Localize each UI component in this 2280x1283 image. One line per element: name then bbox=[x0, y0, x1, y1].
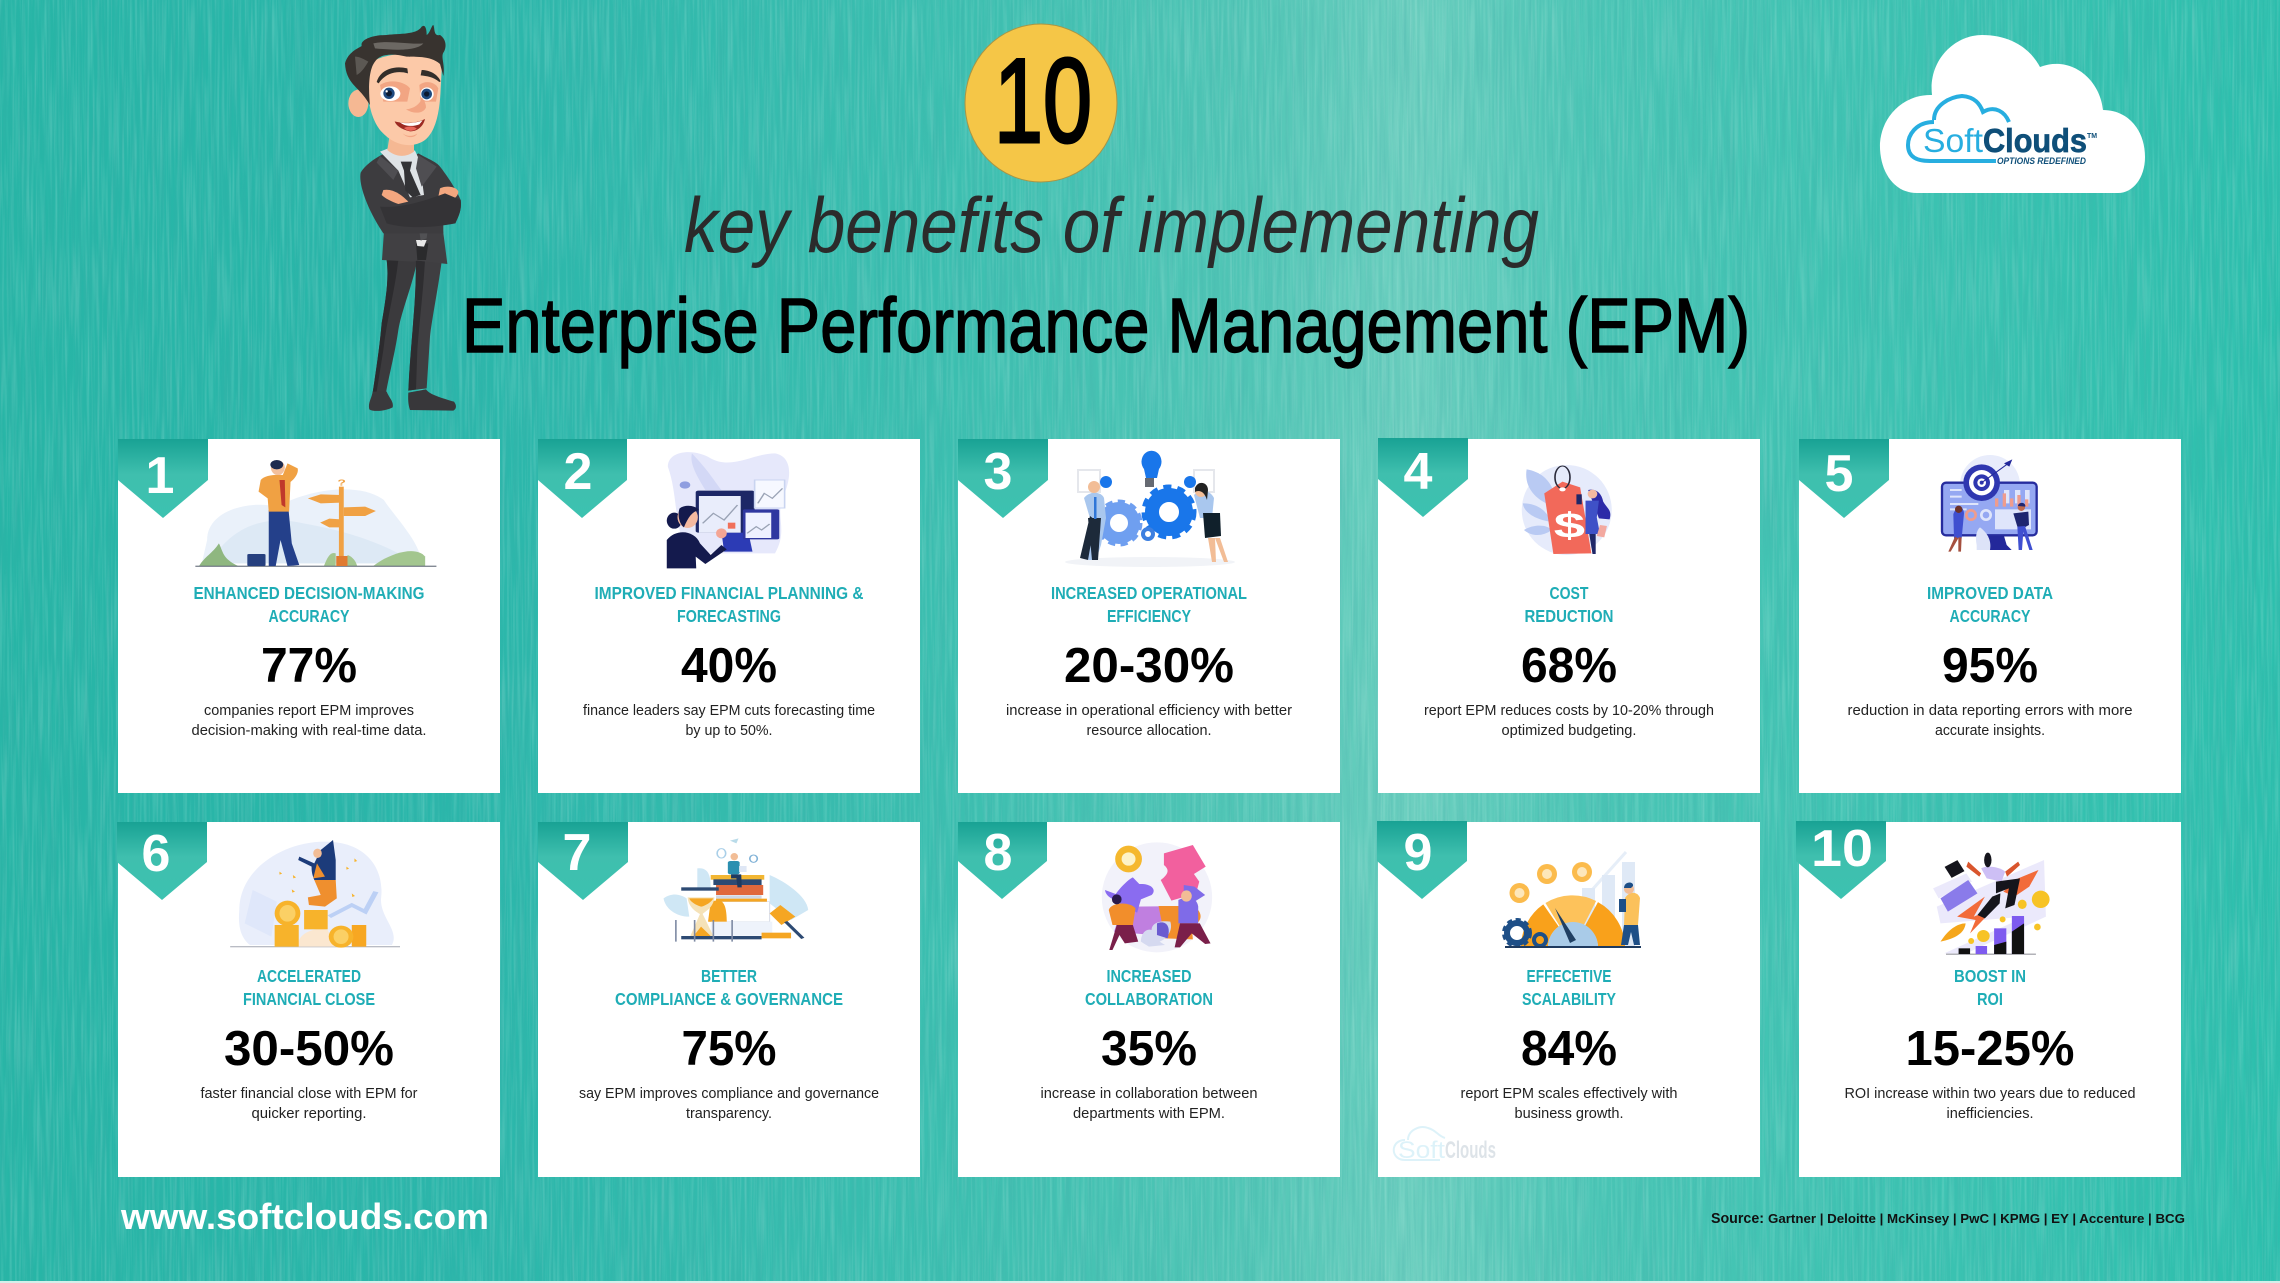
heading: IMPROVED FINANCIAL PLANNING & bbox=[594, 583, 864, 603]
ribbon number 6 bbox=[117, 822, 207, 900]
icon: team turning gears bbox=[1065, 451, 1235, 567]
title: Enterprise Performance Management (EPM) bbox=[462, 283, 1750, 369]
icon: man jumping over coins bbox=[230, 840, 400, 948]
panel: card 3 efficiency: resource allocation. bbox=[1086, 723, 1212, 739]
ribbon number 1: 1 bbox=[146, 447, 174, 505]
panel: card 1 decision-making: ACCURACY bbox=[268, 606, 350, 626]
ribbon number 6: 6 bbox=[142, 825, 170, 883]
ribbon number 4: 4 bbox=[1404, 443, 1433, 501]
logo: SoftClouds cloud: Clouds bbox=[1983, 122, 2087, 159]
statistic: 77% bbox=[261, 639, 357, 693]
icon: woman analysing charts bbox=[667, 452, 789, 568]
panel: card 2 planning bbox=[538, 439, 920, 793]
description: increase in operational efficiency with better bbox=[1006, 703, 1292, 719]
heading: BOOST IN bbox=[1954, 966, 2026, 986]
number 10 badge: 10 bbox=[994, 34, 1092, 168]
logo: SoftClouds cloud: TM bbox=[2087, 133, 2097, 140]
icon: people with puzzle pieces bbox=[1102, 842, 1212, 952]
icon: books, hourglass and gavel bbox=[664, 838, 808, 942]
panel: card 3 efficiency bbox=[958, 439, 1340, 793]
panel: card 6 financial close: FINANCIAL CLOSE bbox=[243, 989, 375, 1009]
panel: card 10 ROI bbox=[1796, 820, 2181, 1177]
description: faster financial close with EPM for bbox=[200, 1086, 418, 1102]
icon: person at signpost bbox=[195, 460, 436, 567]
watermark logo: Soft bbox=[1398, 1137, 1445, 1164]
panel: card 4 cost: REDUCTION bbox=[1524, 606, 1614, 626]
icon: person at signpost: ? bbox=[337, 479, 346, 488]
panel: card 3 efficiency: EFFICIENCY bbox=[1107, 606, 1191, 626]
number 10 badge bbox=[965, 24, 1117, 182]
statistic: 20-30% bbox=[1064, 639, 1234, 693]
ribbon number 1 bbox=[118, 439, 208, 518]
ribbon number 9 bbox=[1377, 821, 1467, 899]
heading: EFFECETIVE bbox=[1526, 966, 1612, 986]
panel: card 10 ROI: inefficiencies. bbox=[1946, 1106, 2034, 1122]
panel: card 5 data accuracy: ACCURACY bbox=[1950, 606, 2031, 626]
icon: rocket and rising bars bbox=[1933, 853, 2050, 955]
watermark logo: Clouds bbox=[1445, 1137, 1496, 1164]
panel: card 9 scalability bbox=[1377, 821, 1760, 1177]
panel: card 6 financial close bbox=[117, 822, 500, 1177]
panel: card 5 data accuracy: accurate insights. bbox=[1935, 723, 2045, 739]
heading: INCREASED OPERATIONAL bbox=[1051, 583, 1247, 603]
ribbon number 5 bbox=[1799, 439, 1889, 518]
heading: ENHANCED DECISION-MAKING bbox=[194, 583, 424, 603]
ribbon number 8: 8 bbox=[984, 824, 1012, 882]
character: businessman with crossed arms bbox=[345, 25, 461, 411]
panel: card 2 planning: by up to 50%. bbox=[686, 723, 772, 739]
panel: card 5 data accuracy bbox=[1799, 439, 2181, 793]
ribbon number 9: 9 bbox=[1404, 824, 1432, 882]
panel: card 6 financial close: quicker reporting. bbox=[252, 1106, 366, 1122]
description: report EPM reduces costs by 10-20% through bbox=[1424, 703, 1714, 719]
panel: card 2 planning: FORECASTING bbox=[677, 606, 781, 626]
watermark logo bbox=[1394, 1127, 1496, 1164]
statistic: 35% bbox=[1101, 1022, 1197, 1076]
subtitle: key benefits of implementing bbox=[684, 181, 1539, 269]
panel: card 7 compliance: transparency. bbox=[686, 1106, 772, 1122]
statistic: 30-50% bbox=[224, 1022, 394, 1076]
statistic: 15-25% bbox=[1906, 1022, 2074, 1076]
description: increase in collaboration between bbox=[1040, 1086, 1258, 1102]
heading: ACCELERATED bbox=[257, 966, 361, 986]
source line: Source: bbox=[1711, 1211, 1764, 1227]
heading: IMPROVED DATA bbox=[1927, 583, 2053, 603]
logo: SoftClouds cloud: OPTIONS REDEFINED bbox=[1997, 156, 2086, 166]
statistic: 75% bbox=[682, 1022, 776, 1076]
logo: SoftClouds cloud: Soft bbox=[1923, 122, 1983, 159]
description: say EPM improves compliance and governance bbox=[579, 1086, 879, 1102]
icon: target and monitor bbox=[1942, 455, 2037, 552]
ribbon number 4 bbox=[1378, 438, 1468, 517]
ribbon number 7 bbox=[538, 822, 628, 900]
heading: INCREASED bbox=[1106, 966, 1192, 986]
panel: card 4 cost bbox=[1378, 438, 1760, 793]
description: report EPM scales effectively with bbox=[1460, 1086, 1678, 1102]
source line: Gartner | Deloitte | McKinsey | PwC | KPMG | EY | Accenture | BCG bbox=[1768, 1211, 2185, 1226]
logo: SoftClouds cloud bbox=[1880, 35, 2145, 193]
panel: card 4 cost: optimized budgeting. bbox=[1502, 723, 1636, 739]
description: companies report EPM improves bbox=[204, 703, 414, 719]
icon: price tag with dollar bbox=[1522, 465, 1612, 555]
panel: card 1 decision-making bbox=[118, 439, 500, 793]
panel: card 7 compliance bbox=[538, 822, 920, 1177]
statistic: 68% bbox=[1521, 639, 1617, 693]
description: ROI increase within two years due to reduced bbox=[1844, 1086, 2136, 1102]
panel: card 1 decision-making: decision-making with real-time data. bbox=[192, 723, 426, 739]
heading: BETTER bbox=[701, 966, 757, 986]
ribbon number 8 bbox=[958, 822, 1047, 899]
ribbon number 3: 3 bbox=[984, 443, 1012, 501]
ribbon number 5: 5 bbox=[1825, 445, 1853, 503]
panel: card 7 compliance: COMPLIANCE & GOVERNANCE bbox=[615, 989, 843, 1009]
ribbon number 2: 2 bbox=[564, 443, 592, 501]
statistic: 40% bbox=[681, 639, 777, 693]
ribbon number 2 bbox=[538, 439, 627, 518]
panel: card 8 collaboration bbox=[958, 822, 1340, 1177]
website link: www.softclouds.com bbox=[120, 1196, 489, 1237]
panel: card 8 collaboration: COLLABORATION bbox=[1085, 989, 1213, 1009]
statistic: 84% bbox=[1521, 1022, 1617, 1076]
ribbon number 7: 7 bbox=[563, 824, 591, 882]
ribbon number 10 bbox=[1796, 820, 1886, 899]
icon: gauge with engineer bbox=[1504, 852, 1641, 948]
ribbon number 3 bbox=[958, 439, 1048, 518]
statistic: 95% bbox=[1942, 639, 2038, 693]
panel: card 10 ROI: ROI bbox=[1977, 989, 2003, 1009]
description: finance leaders say EPM cuts forecasting time bbox=[583, 703, 875, 719]
ribbon number 10: 10 bbox=[1811, 820, 1873, 878]
icon: price tag with dollar: $ bbox=[1554, 506, 1585, 545]
panel: card 9 scalability: business growth. bbox=[1514, 1106, 1624, 1122]
panel: card 9 scalability: SCALABILITY bbox=[1522, 989, 1616, 1009]
panel: card 8 collaboration: departments with EPM. bbox=[1073, 1106, 1225, 1122]
description: reduction in data reporting errors with more bbox=[1848, 703, 2132, 719]
heading: COST bbox=[1550, 583, 1589, 603]
